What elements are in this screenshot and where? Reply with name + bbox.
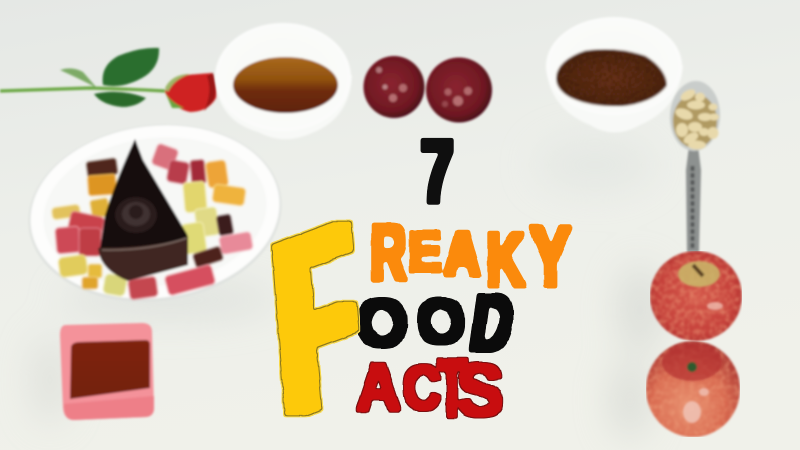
cocoa bowl [546,17,683,132]
word ACTS: T [438,343,466,435]
honey bowl [215,23,352,139]
title: 7 Freaky Food Facts [356,122,571,435]
sauce [70,340,150,399]
word REAKY: K [486,217,525,302]
rose [0,48,216,112]
word OOD: D [466,278,519,368]
apple top [650,251,742,341]
word REAKY: Y [530,208,571,304]
plum left [364,56,424,118]
plate [18,110,292,316]
apples [646,251,742,437]
nuts [673,94,717,148]
spoon of nuts [668,80,722,252]
apple bottom [646,341,740,437]
rose upper leaf [103,48,159,86]
word ACTS: S [457,350,503,432]
word REAKY: A [444,219,480,289]
chocolate swirl [115,197,157,233]
numeral 7: 7 [420,122,454,223]
word ACTS: C [403,354,441,421]
spoon handle [686,146,701,252]
word REAKY [370,208,571,304]
word OOD: O [357,286,407,360]
word ACTS [356,343,503,435]
sauce tray [60,323,154,420]
rose small leaf [60,68,97,88]
candies [51,143,253,300]
word ACTS: A [356,350,401,425]
chocolate cake slice [98,139,188,281]
cocoa powder [556,49,667,106]
plum right [426,58,492,122]
word REAKY: R [370,209,407,297]
plums [364,56,492,122]
dessert plate [18,110,292,316]
word OOD [357,278,519,368]
rose lower leaf [94,92,146,107]
word OOD: O [417,288,465,356]
word REAKY: E [408,221,442,283]
spoon bowl [668,80,722,152]
soft shadows [32,137,662,440]
honey liquid [233,57,338,113]
rose flower [165,73,216,112]
